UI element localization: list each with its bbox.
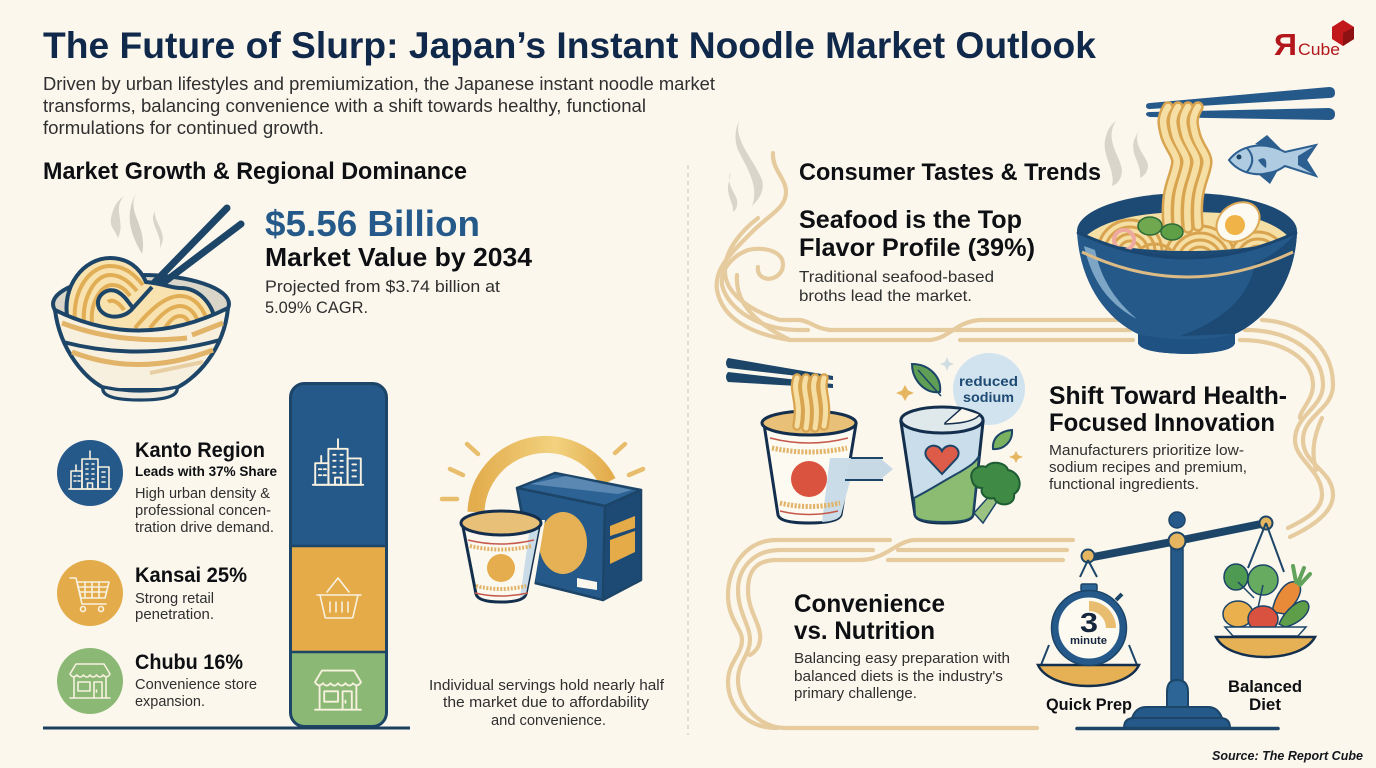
region: Kansai: Kansai 25% <box>135 564 247 587</box>
region: Kansai <box>57 560 247 626</box>
region: Chubu: expansion. <box>135 694 205 710</box>
text: convenience vs nutrition: primary challenge. <box>794 686 917 702</box>
lifted noodles <box>1163 107 1207 228</box>
illustration: balance scale <box>1038 512 1315 728</box>
label: balanced diet: Balanced <box>1228 677 1302 696</box>
source note: Source: The Report Cube <box>1212 749 1363 763</box>
market value stat: $5.56 Billion <box>265 203 480 244</box>
text: health innovation: Manufacturers prioritize low- <box>1049 443 1244 459</box>
healthy cup <box>901 407 983 523</box>
callout: reduced sodium: reduced <box>959 373 1018 389</box>
greens <box>1138 217 1183 240</box>
text: health innovation: functional ingredients. <box>1049 477 1199 493</box>
text: convenience vs nutrition: Balancing easy preparation with <box>794 651 1010 667</box>
region: Chubu <box>57 648 257 714</box>
noodles in bowl <box>1087 212 1287 251</box>
region: Kanto: High urban density & <box>135 486 270 502</box>
dashed column divider <box>687 165 689 735</box>
bowl back <box>1077 193 1297 269</box>
section heading: consumer tastes: Consumer Tastes & Trends <box>799 159 1101 186</box>
scale stand <box>1077 512 1278 728</box>
icon: shopping cart <box>57 560 123 626</box>
region: Kanto: professional concen- <box>135 503 271 519</box>
market value stat: 5.09% CAGR. <box>265 298 368 317</box>
text: seafood flavor: Seafood is the Top <box>799 206 1022 234</box>
left pan with stopwatch <box>1038 560 1139 686</box>
logo: RCube: Я <box>1274 27 1297 62</box>
noodle ribbons <box>717 116 1333 728</box>
market value stat <box>265 203 533 317</box>
icon: leaves and sparkles <box>896 357 1023 463</box>
region: Kansai: penetration. <box>135 607 214 623</box>
intro text: Driven by urban lifestyles and premiumization, the Japanese instant noodle market <box>43 74 715 94</box>
callout: reduced sodium: sodium <box>963 389 1014 405</box>
region: Kansai: Strong retail <box>135 591 214 607</box>
text: health innovation: Focused Innovation <box>1049 409 1275 437</box>
caption: individual servings: Individual servings hold nearly half <box>429 677 665 694</box>
region: Kanto: Kanto Region <box>135 439 265 462</box>
intro text: formulations for continued growth. <box>43 118 324 138</box>
illustration: individual cup and box <box>442 444 643 604</box>
icon: fish <box>1229 135 1316 184</box>
region: Kanto <box>57 439 277 536</box>
text: health innovation: Shift Toward Health- <box>1049 382 1287 410</box>
title: The Future of Slurp: Japan’s Instant Noodle Market Outlook <box>43 24 1096 66</box>
icon: store in bar <box>315 671 361 710</box>
text: health innovation: sodium recipes and premium, <box>1049 460 1247 476</box>
baseline <box>43 726 410 730</box>
section heading: market growth: Market Growth & Regional Dominance <box>43 158 467 185</box>
icon: city <box>57 440 123 506</box>
callout: reduced sodium <box>953 353 1025 425</box>
right pan with vegetables <box>1216 523 1315 657</box>
intro text: transforms, balancing convenience with a shift towards healthy, functional <box>43 96 646 116</box>
logo: RCube <box>1274 20 1354 62</box>
bowl front <box>1077 232 1297 354</box>
classic cup <box>726 358 893 523</box>
icon: noodle bowl with chopsticks <box>53 194 241 400</box>
text: seafood flavor: Traditional seafood-based <box>799 269 994 286</box>
caption: individual servings: the market due to affordability <box>443 694 650 711</box>
label: balanced diet: Diet <box>1249 695 1281 714</box>
region: Kanto: tration drive demand. <box>135 520 274 536</box>
logo: RCube: Cube <box>1298 40 1340 59</box>
icon: convenience store <box>57 648 123 714</box>
market value stat: Market Value by 2034 <box>265 242 533 272</box>
left pan with stopwatch: minute <box>1070 635 1107 647</box>
icon: city in bar <box>313 439 363 485</box>
illustration: classic cup to healthy cup <box>726 353 1025 523</box>
text: seafood flavor: Flavor Profile (39%) <box>799 234 1035 262</box>
narutomaki <box>1114 230 1134 250</box>
steam <box>1105 121 1148 186</box>
market value stat: Projected from $3.74 billion at <box>265 277 500 296</box>
text: health innovation <box>1049 382 1287 493</box>
region: Chubu: Chubu 16% <box>135 651 243 674</box>
text: seafood flavor: broths lead the market. <box>799 288 972 305</box>
label: balanced diet <box>1228 677 1302 714</box>
left pan with stopwatch: 3 <box>1080 607 1098 638</box>
chopsticks <box>1146 87 1335 120</box>
text: convenience vs nutrition: balanced diets is the industry's <box>794 669 1003 685</box>
icon: broccoli <box>971 463 1020 523</box>
icon: basket in bar <box>317 578 361 618</box>
text: convenience vs nutrition: Convenience <box>794 590 945 618</box>
caption: individual servings <box>429 677 665 729</box>
illustration: ramen bowl <box>1077 87 1335 354</box>
label: quick prep: Quick Prep <box>1046 695 1132 714</box>
text: convenience vs nutrition <box>794 590 1010 702</box>
egg <box>1209 194 1267 250</box>
stacked share bar <box>290 384 386 726</box>
text: convenience vs nutrition: vs. Nutrition <box>794 617 935 645</box>
region: Kanto: Leads with 37% Share <box>135 464 277 479</box>
icon: heart <box>925 446 959 474</box>
text: seafood flavor <box>799 206 1035 305</box>
caption: individual servings: and convenience. <box>491 712 606 729</box>
region: Chubu: Convenience store <box>135 677 257 693</box>
intro text <box>43 74 715 138</box>
